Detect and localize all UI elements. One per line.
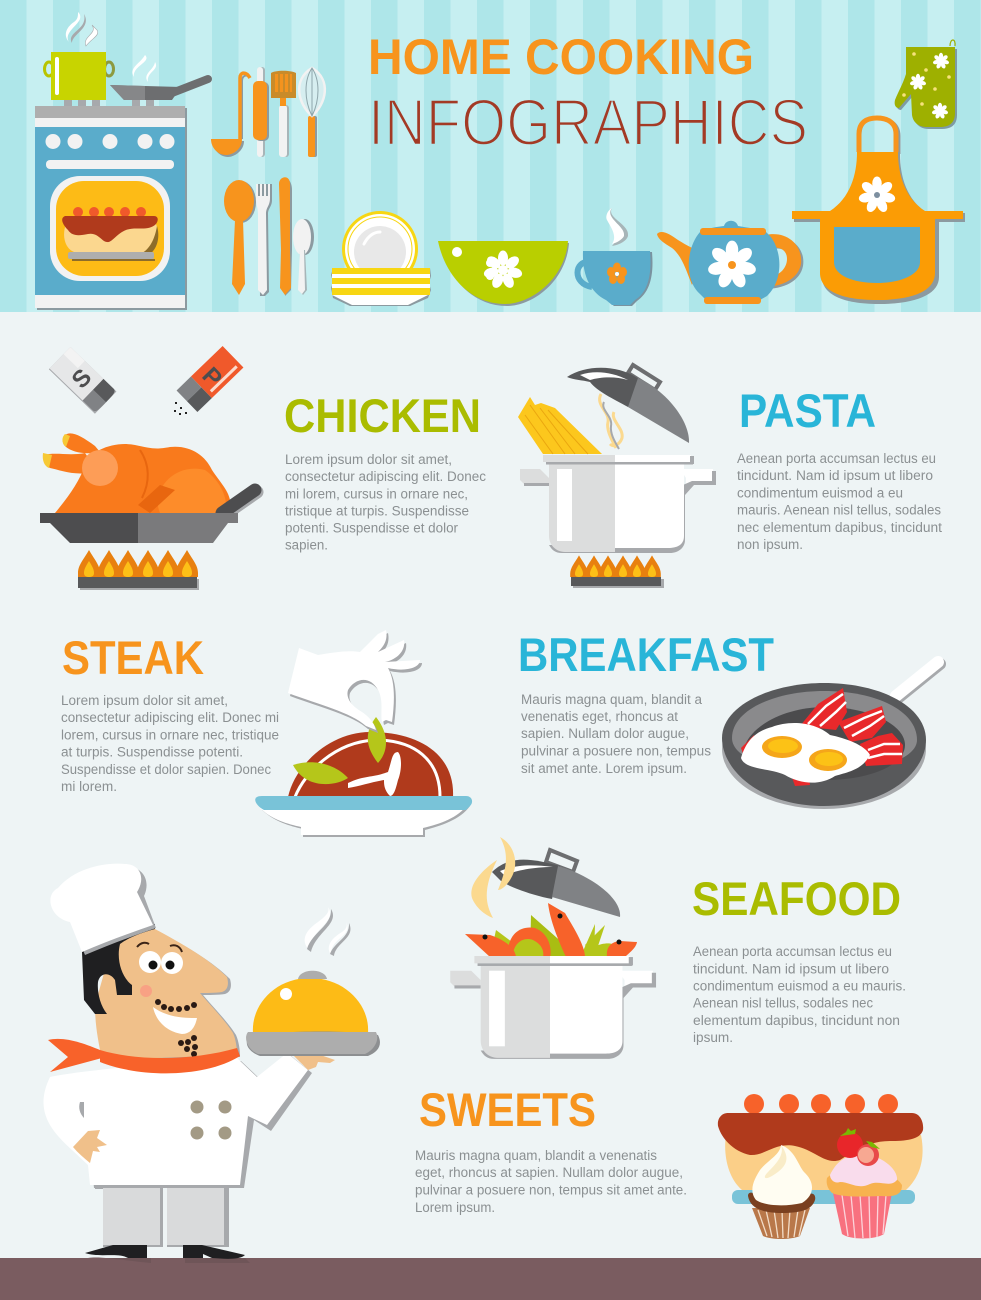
body text: seafood: Aenean porta accumsan lectus eu [693, 944, 892, 959]
title line: infographics: INFOGRAPHICS [368, 86, 808, 159]
body text: sweets: eget, rhoncus at sapien. Nullam dolor augue, [415, 1165, 683, 1180]
body text: pasta: Aenean porta accumsan lectus eu [737, 451, 936, 466]
icon: rolling pin [253, 67, 269, 157]
body text: seafood: condimentum euismod a eu mauris. [693, 978, 906, 994]
cake [718, 1094, 923, 1204]
body text: breakfast: sapien. Nullam dolor augue, [521, 726, 689, 741]
icon: apron [792, 118, 965, 304]
pepper grains [174, 402, 187, 415]
body text: seafood: tincidunt. Nam id ipsum ut libero [693, 962, 889, 976]
panel: sweets illustration [718, 1094, 923, 1239]
body text: pasta: condimentum euismod a eu [737, 486, 903, 500]
body text: sweets: pulvinar a posuere non, tempus sit amet ante. [415, 1182, 687, 1198]
panel: chicken text [284, 389, 486, 552]
body text: chicken: potenti. Suspendisse et dolor [285, 520, 458, 536]
body text: steak: at turpis. Suspendisse potenti. [61, 744, 243, 760]
serving tray and dome [246, 971, 380, 1056]
panel: breakfast illustration [722, 662, 940, 809]
bacon [741, 688, 903, 786]
body text: breakfast: Mauris magna quam, blandit a [521, 692, 702, 707]
panel: breakfast text [518, 628, 774, 776]
icon: spatula [271, 71, 296, 157]
body text: pasta: nec elementum dapibus, tincidunt [737, 520, 942, 535]
icon: teapot [657, 221, 803, 304]
icon: teaspoon [293, 219, 314, 295]
body text: steak [61, 693, 279, 794]
title [368, 29, 808, 159]
steam [600, 394, 622, 448]
panel: seafood illustration [450, 837, 656, 1059]
pan handle [896, 662, 940, 698]
pot lid [567, 365, 689, 443]
icon: salt shaker [49, 347, 116, 414]
hand on hip [73, 1130, 107, 1163]
frying pan [722, 683, 926, 809]
body text: chicken: sapien. [285, 538, 328, 552]
heading: sweets: SWEETS [419, 1083, 596, 1136]
shoes [85, 1245, 250, 1263]
body text: seafood: Aenean nisl tellus, sodales nec [693, 996, 873, 1010]
body text: chicken: tristique at turpis. Suspendisse [285, 504, 469, 518]
body text: steak: Suspendisse et dolor sapien. Donec [61, 762, 271, 777]
garnish leaves [471, 837, 515, 918]
heading: pasta: PASTA [739, 384, 876, 437]
icon: pepper shaker [177, 346, 243, 412]
icon: fork [256, 184, 272, 296]
body text: chicken: consectetur adipiscing elit. Donec [285, 469, 486, 484]
leaf: on plate [293, 762, 348, 784]
body text: chicken [285, 452, 486, 552]
hand [288, 630, 422, 733]
chef hat [50, 864, 156, 955]
head [82, 924, 240, 1062]
leaf: on steak [368, 717, 386, 763]
jacket [44, 1053, 312, 1188]
body text: sweets [415, 1148, 687, 1215]
vanilla cupcake [748, 1145, 815, 1239]
body text: seafood [693, 944, 906, 1045]
icon: salt shaker: S [67, 364, 97, 394]
heading: breakfast: BREAKFAST [518, 628, 774, 681]
body text: steak: consectetur adipiscing elit. Donec mi [61, 710, 279, 725]
title line: home cooking: HOME COOKING [368, 29, 754, 85]
icon: green bowl [438, 241, 569, 306]
icon: pepper shaker: P [197, 362, 227, 392]
body text: sweets: Lorem ipsum. [415, 1200, 495, 1215]
icon: whisk [299, 68, 325, 157]
steam above dome [305, 907, 350, 956]
body text: steak: mi lorem. [61, 779, 117, 794]
pot lid [492, 850, 620, 917]
plate [255, 796, 472, 837]
body text: breakfast: sit amet ante. Lorem ipsum. [521, 761, 687, 776]
body text: breakfast: pulvinar a posuere non, tempus [521, 744, 711, 758]
roast chicken [43, 433, 230, 513]
burner flames [570, 555, 664, 588]
icon: spoon [224, 180, 256, 295]
neck scarf [48, 1039, 240, 1073]
panel: chef character [44, 864, 380, 1263]
icon: pot with steam on stove [44, 12, 114, 106]
icon: ladle [211, 73, 250, 157]
icon: plates [331, 211, 431, 306]
heading: steak: STEAK [62, 631, 204, 684]
steak on plate [288, 732, 453, 797]
panel: steak text [61, 631, 279, 794]
icon: oven mitt [895, 40, 957, 129]
body text: chicken: mi lorem, cursus in ornare nec, [285, 486, 468, 502]
heading: seafood: SEAFOOD [692, 872, 901, 925]
body text: chicken: Lorem ipsum dolor sit amet, [285, 452, 452, 467]
trousers [95, 1185, 229, 1247]
seafood contents [465, 903, 637, 958]
body text: pasta [737, 451, 942, 552]
header striped panel [0, 0, 981, 312]
body text: steak: lorem, cursus in ornare nec, tristique [61, 728, 279, 742]
hand under tray [288, 1048, 335, 1070]
body text: sweets: Mauris magna quam, blandit a venenatis [415, 1148, 657, 1163]
body text: breakfast [521, 692, 711, 776]
icon: stove and oven [35, 106, 187, 310]
burner flames [78, 550, 199, 590]
spaghetti [518, 397, 602, 454]
heading: chicken: CHICKEN [284, 389, 481, 442]
body text: pasta: non ipsum. [737, 537, 803, 552]
icon: teacup with steam [578, 208, 652, 306]
fried eggs [741, 723, 870, 783]
panel: seafood text [692, 872, 906, 1045]
strawberry cupcake [827, 1128, 902, 1238]
body text: steak: Lorem ipsum dolor sit amet, [61, 693, 228, 708]
panel: steak illustration [255, 630, 472, 837]
panel: sweets text [415, 1083, 687, 1215]
body text: breakfast: venenatis eget, rhoncus at [521, 709, 678, 724]
pasta pot [520, 455, 716, 553]
icon: knife [279, 177, 292, 296]
body text: pasta: mauris. Aenean nisl tellus, sodales [737, 502, 941, 518]
body text: pasta: tincidunt. Nam id ipsum ut libero [737, 468, 933, 483]
frying pan [224, 492, 257, 515]
body text: seafood: elementum dapibus, tincidunt non [693, 1013, 900, 1028]
floor band [0, 1258, 981, 1300]
body text: seafood: ipsum. [693, 1030, 733, 1045]
icon: frying pan with steam [110, 55, 208, 106]
seafood pot [450, 956, 656, 1059]
panel: pasta illustration [518, 365, 716, 588]
panel: chicken illustration [40, 346, 257, 590]
panel: pasta text [737, 384, 942, 552]
